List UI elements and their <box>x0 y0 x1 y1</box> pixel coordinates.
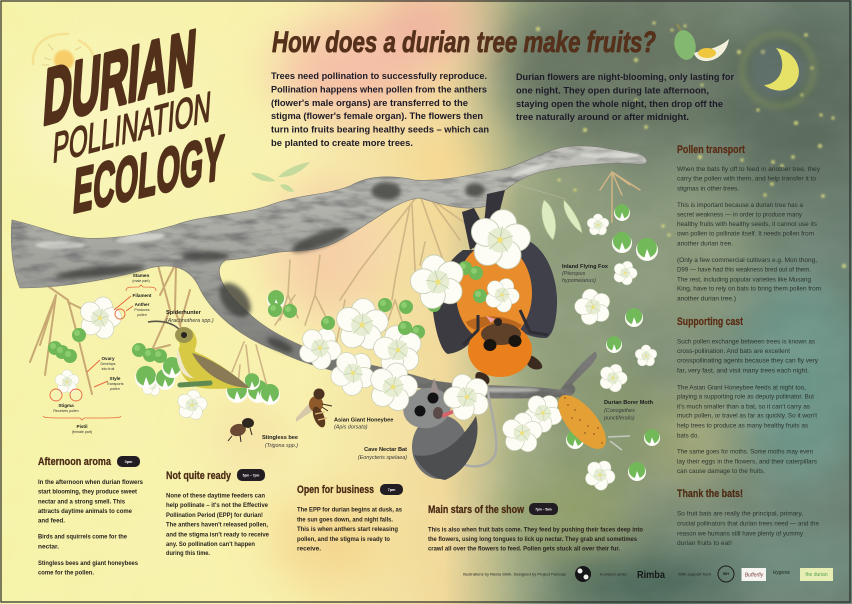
panel: not quite ready: during this time. <box>166 550 210 557</box>
illustration: inland flying fox <box>433 190 557 385</box>
panel: afternoon aroma: start blooming, they produce sweet <box>38 488 137 496</box>
ovary label: Ovary <box>101 356 115 361</box>
anther label: pollen <box>137 313 147 317</box>
stigma label: Stigma <box>58 403 74 408</box>
logo: green box: the durian <box>805 572 828 578</box>
species label: stingless bee <box>262 435 298 449</box>
intro text: pollination <box>271 70 489 148</box>
intro text: pollination: Trees need pollination to successfully reproduce. <box>271 70 487 81</box>
intro text: pollination: be planted to create more trees. <box>271 137 413 148</box>
panel: main stars of the show: the flowers, using long tongues to lick up nectar. They grab and sometimes <box>428 536 638 543</box>
bat wing right <box>510 240 557 338</box>
logo: round black badge <box>575 566 591 582</box>
species label: spiderhunter: Spiderhunter <box>166 310 202 316</box>
anther label: Anther <box>135 302 150 307</box>
panel: supporting cast: cross-pollination. And bats are excellent <box>677 348 790 355</box>
filament label: Filament <box>133 293 152 298</box>
species label: stingless bee: (Trigona spp.) <box>265 443 298 449</box>
panel: thank the bats <box>677 488 820 547</box>
panel: supporting cast: playing a supporting role as deputy pollinator. But <box>677 394 814 400</box>
time pill: 7pm-5am <box>529 503 558 515</box>
leaves near bat <box>508 182 582 240</box>
credits and logos <box>463 566 833 582</box>
panel: supporting cast: much pollen, or travel as far as quickly. So it won't <box>677 412 817 420</box>
stamen label: Stamen <box>133 273 149 278</box>
panel: afternoon aroma: Birds and squirrels come for the <box>38 534 128 540</box>
time pill: 7pm: 7pm <box>388 488 396 492</box>
anther label: Produces <box>134 308 150 312</box>
pistil label: Pistil <box>77 424 87 429</box>
panel: pollen transport: carry the pollen with them, and help transfer it to <box>677 176 817 182</box>
logo: white box <box>742 568 766 581</box>
logo: circular stamp <box>718 566 734 582</box>
species label: inland flying fox: (Pteropus <box>562 271 586 277</box>
ovary label: Develops <box>101 362 116 366</box>
intro text: pollination: Pollination happens when pollen from the anthers <box>271 84 487 94</box>
illustration: asian giant honeybee <box>296 388 332 429</box>
species label: asian giant honeybee: (Apis dorsata) <box>334 424 368 430</box>
credits and logos: Illustrations by Reeta Shirk. Designed by Project Pampas <box>463 572 566 576</box>
panel: thank the bats: crucial pollinators that durian trees need — and the <box>677 520 820 528</box>
panel: afternoon aroma: Stingless bees and giant honeybees <box>38 560 139 567</box>
panel: afternoon aroma: nectar and a strong smell. This <box>38 498 126 506</box>
panel: supporting cast: can cause damage to the fruits. <box>677 468 765 475</box>
heading: How does a durian tree make fruits? <box>272 26 656 59</box>
ovary label: into fruit <box>102 367 114 371</box>
illustration: flowers <box>48 204 660 498</box>
style label <box>94 376 124 391</box>
panel: pollen transport: The rest, including popular varieties like Musang <box>677 276 812 284</box>
intro text: night blooming: one night. They open during late afternoon, <box>516 84 709 96</box>
logo: white box: Bufferfly <box>745 572 764 578</box>
species label: asian giant honeybee <box>334 418 393 430</box>
panel: pollen transport: D99 — have had this weakness bred out of them. <box>677 266 811 274</box>
panel: afternoon aroma: and feed. <box>38 518 65 524</box>
species label: spiderhunter <box>166 310 214 324</box>
panel: pollen transport: This is important because a durian tree has a <box>677 202 804 209</box>
panel: supporting cast <box>677 316 819 475</box>
time pill: 7pm-5am: 7pm – 5am <box>535 508 552 512</box>
species label: stingless bee: Stingless bee <box>262 435 298 441</box>
logo: circular stamp: BH <box>723 571 729 576</box>
panel: afternoon aroma: attracts daytime animals to come <box>38 508 133 515</box>
panel: pollen transport: secret weakness — in order to produce many <box>677 212 803 218</box>
species label: spiderhunter: (Arachnothera spp.) <box>166 318 214 324</box>
stamen label <box>126 273 156 291</box>
stigma label: Receives pollen <box>53 409 79 413</box>
panel: supporting cast: it's much smaller than a bat, so it can't carry as <box>677 404 810 410</box>
panel: supporting cast: Supporting cast <box>677 316 743 328</box>
species label: inland flying fox: Inland Flying Fox <box>562 264 609 270</box>
species label: inland flying fox: hypomelanus) <box>562 278 596 284</box>
panel: pollen transport: healthy fruits with healthy seeds, it cannot use its <box>677 221 817 228</box>
species label: cave nectar bat: (Eonycteris spelaea) <box>358 455 407 461</box>
species label: durian borer moth: punctiferalis) <box>603 416 635 422</box>
intro text: night blooming: tree naturally around or after midnight. <box>516 111 689 122</box>
panel: thank the bats: reason we humans still have plenty of yummy <box>677 530 804 538</box>
flower anatomy diagram labels <box>43 273 156 434</box>
panel: not quite ready: any. So pollination can't happen <box>166 541 255 548</box>
panel: open for business: receive. <box>297 546 321 552</box>
panel: supporting cast: The Asian Giant Honeybee feeds at night too, <box>677 384 806 392</box>
panel: pollen transport: own pollen to pollinate itself. It needs pollen from <box>677 230 814 238</box>
panel: supporting cast: crosspollinating agents because they can fly very <box>677 358 819 364</box>
panel: pollen transport: (Only a few commercial cultivars e.g. Mon thong, <box>677 257 817 264</box>
panel: supporting cast: far, very fast, and visit many trees each night. <box>677 368 809 374</box>
panel: afternoon aroma <box>38 456 144 576</box>
species label: durian borer moth: (Conogethes <box>604 408 635 414</box>
panel: supporting cast: bats do. <box>677 432 699 440</box>
intro text: night blooming: Durian flowers are night-blooming, only lasting for <box>516 71 734 82</box>
time pill: 3pm: 3pm <box>125 460 133 464</box>
panel: thank the bats: durian fruits to eat! <box>677 540 732 547</box>
night sky stars <box>536 21 846 268</box>
icon: crescent moon <box>742 34 814 106</box>
infographic canvas: ECOLOGY <box>71 123 226 227</box>
illustration: cave nectar bat <box>399 378 496 480</box>
panel: supporting cast: The same goes for moths. Some moths may even <box>677 448 814 456</box>
panel: pollen transport <box>677 144 821 302</box>
panel: not quite ready: Pollination Period (EPP) for durian! <box>166 512 263 519</box>
panel: main stars of the show <box>428 503 643 552</box>
bat head <box>468 316 542 385</box>
panel: supporting cast: Such pollen exchange between trees is known as <box>677 338 815 346</box>
credits and logos: A project under <box>600 572 628 576</box>
pistil label <box>43 416 121 434</box>
panel: main stars of the show: This is also when fruit bats come. They feed by pushing their faces deep into <box>428 526 643 534</box>
stigma label <box>50 389 82 413</box>
panel: open for business: This is when anthers start releasing <box>297 526 398 533</box>
panel: open for business <box>297 484 403 552</box>
stamen label: (male part) <box>132 279 150 283</box>
panel: not quite ready <box>166 469 270 557</box>
illustration: stingless bee <box>228 418 254 442</box>
anther label <box>115 302 150 319</box>
icon: small leaves <box>251 162 310 192</box>
panel: pollen transport: King, have to rely on bats to bring them pollen from <box>677 286 821 292</box>
panel: afternoon aroma: In the afternoon when durian flowers <box>38 479 144 486</box>
illustration: durian borer moth <box>550 387 630 457</box>
intro text: night blooming <box>516 71 734 122</box>
panel: pollen transport: another durian tree. <box>677 240 733 248</box>
panel: afternoon aroma: nectar. <box>38 544 59 550</box>
panel: pollen transport: another durian tree.) <box>677 296 736 302</box>
time pill: 5pm-7pm: 5pm – 7pm <box>243 474 259 478</box>
species label: cave nectar bat: Cave Nectar Bat <box>364 447 407 453</box>
species label: durian borer moth <box>603 400 654 422</box>
panel: pollen transport: Pollen transport <box>677 144 745 156</box>
tree branch <box>11 146 647 398</box>
panel: pollen transport: stigmas in other trees. <box>677 186 739 192</box>
panel: supporting cast: help trees to produce as many healthy fruits as <box>677 422 808 430</box>
ovary label <box>87 356 116 372</box>
species label: cave nectar bat <box>358 447 407 461</box>
panel: supporting cast: lay their eggs in the flowers, and their caterpillars <box>677 458 817 466</box>
filament label <box>114 293 152 310</box>
panel: not quite ready: help pollinate – it's not the Effective <box>166 502 269 509</box>
style label: pollen <box>110 387 120 391</box>
panel: open for business: Open for business <box>297 484 374 496</box>
pistil label: (female part) <box>72 430 92 434</box>
intro text: pollination: turn into fruits bearing healthy seeds – which can <box>271 124 489 134</box>
bat body <box>456 243 532 343</box>
panel: open for business: The EPP for durian begins at dusk, as <box>297 506 403 514</box>
panel: main stars of the show: crawl all over the flowers to feed. Pollen gets stuck all over their fur. <box>428 546 620 552</box>
icon: sun <box>33 34 95 70</box>
panel: open for business: pollen, and the stigma is ready to <box>297 536 390 543</box>
panel: afternoon aroma: come for the pollen. <box>38 570 94 576</box>
panel: open for business: the sun goes down, and night falls. <box>297 516 393 524</box>
bat wing left <box>433 250 480 354</box>
style label: Transports <box>106 382 124 386</box>
panel: not quite ready: and the stigma isn't ready to receive <box>166 532 270 538</box>
icon: durian fruit <box>672 24 729 62</box>
logo: hype: Hygiene <box>773 570 790 576</box>
logo: green box <box>800 568 833 581</box>
panel: thank the bats: So fruit bats are really the principal, primary, <box>677 510 803 518</box>
panel: not quite ready: Not quite ready <box>166 470 231 482</box>
species label: asian giant honeybee: Asian Giant Honeybee <box>334 418 393 424</box>
flower stalks <box>30 172 640 394</box>
illustration: spiderhunter bird <box>148 321 250 389</box>
species label: inland flying fox <box>562 264 609 284</box>
title: POLLINATION <box>51 83 213 173</box>
credits and logos: With support from <box>678 572 711 576</box>
intro text: pollination: stigma (flower's female organ). The flowers then <box>271 110 483 121</box>
panel: pollen transport: When the bats fly off to feed in another tree, they <box>677 166 821 173</box>
panel: afternoon aroma: Afternoon aroma <box>38 456 111 468</box>
species label: durian borer moth: Durian Borer Moth <box>604 400 654 406</box>
panel: main stars of the show: Main stars of the show <box>428 504 525 516</box>
panel: not quite ready: None of these daytime feeders can <box>166 492 265 500</box>
panel: thank the bats: Thank the bats! <box>677 488 743 500</box>
panel: not quite ready: The anthers haven't released pollen, <box>166 522 268 528</box>
style label: Style <box>110 376 121 381</box>
logo: Rimba: Rimba <box>637 570 665 581</box>
intro text: night blooming: staying open the whole night, then drop off the <box>516 98 723 109</box>
intro text: pollination: (flower's male organs) are transferred to the <box>271 97 468 108</box>
title <box>41 12 226 227</box>
